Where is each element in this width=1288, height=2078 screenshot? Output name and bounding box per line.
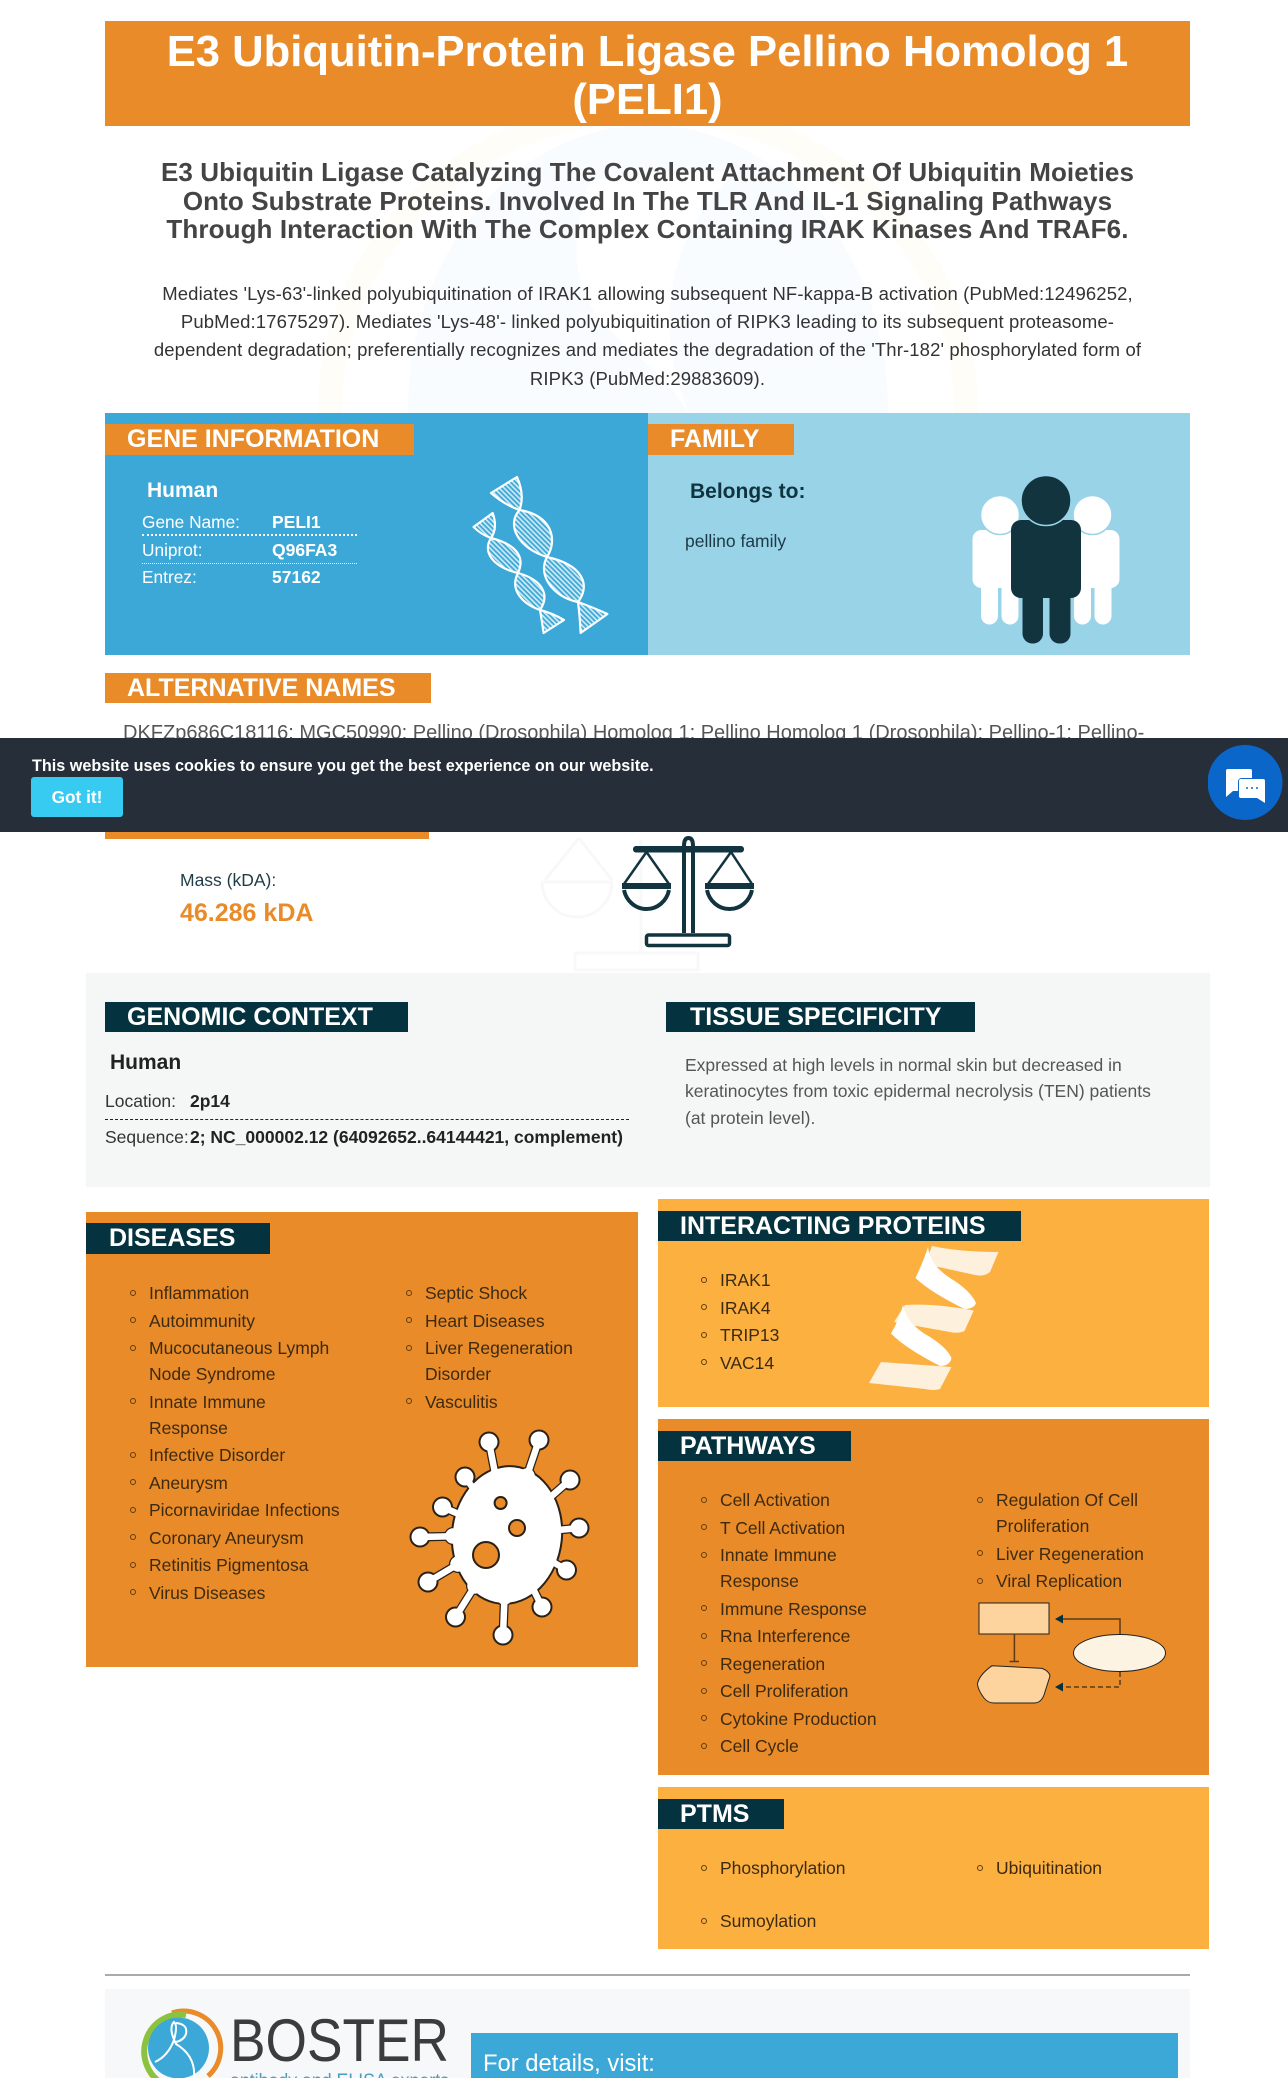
heading: gene information: GENE INFORMATION bbox=[127, 425, 379, 453]
title: E3 Ubiquitin-Protein Ligase Pellino Homolog 1 bbox=[167, 28, 1128, 76]
heading: molecular mass (mostly hidden) bbox=[105, 800, 429, 839]
belongs to label: Belongs to: bbox=[690, 480, 806, 503]
tissue specificity text: (at protein level). bbox=[685, 1108, 815, 1128]
got it button: Got it! bbox=[52, 787, 102, 807]
location row: 2p14 bbox=[190, 1091, 230, 1111]
entrez row: Entrez: bbox=[142, 567, 197, 587]
subtitle bbox=[161, 157, 1134, 244]
panel: gene information bbox=[105, 413, 648, 655]
disease list left: Aneurysm bbox=[149, 1473, 228, 1493]
panel: diseases bbox=[86, 1212, 638, 1667]
tissue specificity text bbox=[685, 1055, 1151, 1128]
disease list left: Autoimmunity bbox=[149, 1311, 255, 1331]
pathway list right: Proliferation bbox=[996, 1516, 1089, 1536]
pathway list left: Response bbox=[720, 1571, 799, 1591]
pathway list left: Cell Activation bbox=[720, 1490, 830, 1510]
pathway list right bbox=[977, 1490, 1144, 1591]
icon: balance scale bbox=[622, 836, 754, 948]
disease list right: Septic Shock bbox=[425, 1283, 527, 1303]
disease list left: Node Syndrome bbox=[149, 1364, 275, 1384]
heading: pathways bbox=[658, 1431, 851, 1461]
ptm list left bbox=[701, 1858, 846, 1931]
pathway list right: Regulation Of Cell bbox=[996, 1490, 1138, 1510]
panel: footer bbox=[105, 1989, 1190, 2078]
heading: alternative names: ALTERNATIVE NAMES bbox=[127, 674, 396, 702]
gene species: Human bbox=[147, 479, 218, 502]
disease list left: Retinitis Pigmentosa bbox=[149, 1555, 309, 1575]
subtitle: Through Interaction With The Complex Containing IRAK Kinases And TRAF6. bbox=[166, 214, 1129, 244]
gene name row: Gene Name: bbox=[142, 512, 240, 532]
disease list left: Response bbox=[149, 1418, 228, 1438]
mass label: Mass (kDA): bbox=[180, 870, 276, 890]
panel: genomic context and tissue specificity: 2; NC_000002.12 (64092652..64144421, complement) bbox=[190, 1127, 623, 1147]
disease list left bbox=[130, 1283, 340, 1603]
disease list right: Heart Diseases bbox=[425, 1311, 545, 1331]
disease list right: Liver Regeneration bbox=[425, 1338, 573, 1358]
icon: protein helix ribbon bbox=[869, 1246, 998, 1390]
entrez row: 57162 bbox=[272, 567, 321, 587]
protein list: IRAK4 bbox=[720, 1298, 771, 1318]
subtitle: E3 Ubiquitin Ligase Catalyzing The Covalent Attachment Of Ubiquitin Moieties bbox=[161, 157, 1134, 187]
panel: interacting proteins bbox=[658, 1199, 1209, 1407]
pathway list left: T Cell Activation bbox=[720, 1518, 845, 1538]
heading: ptms bbox=[658, 1799, 784, 1829]
entrez row bbox=[142, 567, 321, 587]
details text: For details, visit: bbox=[483, 2050, 655, 2077]
subtitle: Onto Substrate Proteins. Involved In The TLR And IL-1 Signaling Pathways bbox=[183, 186, 1112, 216]
call to action box bbox=[471, 2033, 1178, 2078]
pathway list left: Cell Cycle bbox=[720, 1736, 799, 1756]
pathway list left: Cell Proliferation bbox=[720, 1681, 848, 1701]
gene name row: PELI1 bbox=[272, 512, 321, 532]
heading: ptms: PTMS bbox=[680, 1800, 749, 1828]
title bbox=[105, 21, 1190, 126]
pathway list left: Rna Interference bbox=[720, 1626, 850, 1646]
icon: people group bbox=[972, 476, 1120, 644]
panel: pathways bbox=[658, 1419, 1209, 1775]
protein list: IRAK1 bbox=[720, 1270, 771, 1290]
protein list bbox=[701, 1270, 779, 1373]
gene name row bbox=[142, 512, 357, 536]
pathway list left: Innate Immune bbox=[720, 1545, 837, 1565]
heading: diseases bbox=[86, 1223, 270, 1254]
title: (PELI1) bbox=[572, 76, 723, 124]
family name: pellino family bbox=[685, 531, 786, 551]
disease list left: Infective Disorder bbox=[149, 1445, 285, 1465]
uniprot row: Uniprot: bbox=[142, 540, 203, 560]
disease list right: Disorder bbox=[425, 1364, 491, 1384]
icon: DNA helix bbox=[472, 476, 608, 634]
disease list left: Picornaviridae Infections bbox=[149, 1500, 340, 1520]
disease list right: Vasculitis bbox=[425, 1392, 498, 1412]
footer divider bbox=[105, 1974, 1190, 1976]
sequence row: Sequence: bbox=[105, 1127, 189, 1147]
disease list left: Innate Immune bbox=[149, 1392, 266, 1412]
pathway list left: Immune Response bbox=[720, 1599, 867, 1619]
protein list: TRIP13 bbox=[720, 1325, 779, 1345]
tissue specificity text: Expressed at high levels in normal skin but decreased in bbox=[685, 1055, 1122, 1075]
pathway list left: Cytokine Production bbox=[720, 1709, 877, 1729]
description text: dependent degradation; preferentially recognizes and mediates the degradation of the 'Thr-182' phosphorylated form of bbox=[154, 339, 1141, 360]
pathway list right: Viral Replication bbox=[996, 1571, 1122, 1591]
protein list: VAC14 bbox=[720, 1353, 774, 1373]
uniprot row bbox=[142, 540, 357, 564]
disease list left: Coronary Aneurysm bbox=[149, 1528, 304, 1548]
icon: chat button bbox=[1208, 745, 1282, 820]
icon: virus bbox=[410, 1430, 590, 1646]
ptm list left: Sumoylation bbox=[720, 1911, 816, 1931]
logo: Boster bbox=[141, 2007, 449, 2078]
alternative names text: DKFZp686C18116; MGC50990; Pellino (Drosophila) Homolog 1; Pellino Homolog 1 (Drosophila); Pellino-1; Pellino- bbox=[123, 722, 1144, 744]
location row: Location: bbox=[105, 1091, 176, 1111]
heading: genomic context: GENOMIC CONTEXT bbox=[127, 1003, 373, 1031]
disease list left: Virus Diseases bbox=[149, 1583, 265, 1603]
heading: family: FAMILY bbox=[670, 425, 759, 453]
heading: tissue specificity: TISSUE SPECIFICITY bbox=[690, 1003, 941, 1031]
disease list left: Mucocutaneous Lymph bbox=[149, 1338, 329, 1358]
cookie message: This website uses cookies to ensure you get the best experience on our website. bbox=[32, 757, 654, 775]
panel: genomic context and tissue specificity bbox=[86, 973, 1210, 1187]
tissue specificity text: keratinocytes from toxic epidermal necrolysis (TEN) patients bbox=[685, 1081, 1151, 1101]
description text: Mediates 'Lys-63'-linked polyubiquitination of IRAK1 allowing subsequent NF-kappa-B activation (PubMed:12496252, bbox=[162, 282, 1133, 304]
sequence row bbox=[105, 1127, 623, 1147]
pathway list right: Liver Regeneration bbox=[996, 1544, 1144, 1564]
heading: interacting proteins: INTERACTING PROTEINS bbox=[680, 1212, 986, 1240]
disease list right bbox=[406, 1283, 573, 1412]
ptm list left: Phosphorylation bbox=[720, 1858, 846, 1878]
icon: pathway diagram bbox=[976, 1602, 1166, 1704]
heading: family bbox=[648, 424, 794, 455]
description text: RIPK3 (PubMed:29883609). bbox=[530, 368, 765, 389]
mass value: 46.286 kDA bbox=[180, 899, 313, 927]
location row bbox=[105, 1090, 629, 1120]
cookie banner bbox=[0, 738, 1288, 832]
heading: pathways: PATHWAYS bbox=[680, 1432, 816, 1460]
got it button bbox=[31, 777, 123, 817]
heading: diseases: DISEASES bbox=[109, 1224, 235, 1252]
ptm list right: Ubiquitination bbox=[996, 1858, 1102, 1878]
disease list left: Inflammation bbox=[149, 1283, 249, 1303]
species: Human bbox=[110, 1051, 181, 1074]
description text: PubMed:17675297). Mediates 'Lys-48'- linked polyubiquitination of RIPK3 leading to its subsequent proteasome- bbox=[181, 311, 1114, 332]
pathway list left: Regeneration bbox=[720, 1654, 825, 1674]
uniprot row: Q96FA3 bbox=[272, 540, 337, 560]
description text bbox=[154, 282, 1142, 389]
panel: ptms bbox=[658, 1787, 1209, 1949]
pathway list left bbox=[701, 1490, 877, 1756]
panel: family bbox=[648, 413, 1190, 655]
